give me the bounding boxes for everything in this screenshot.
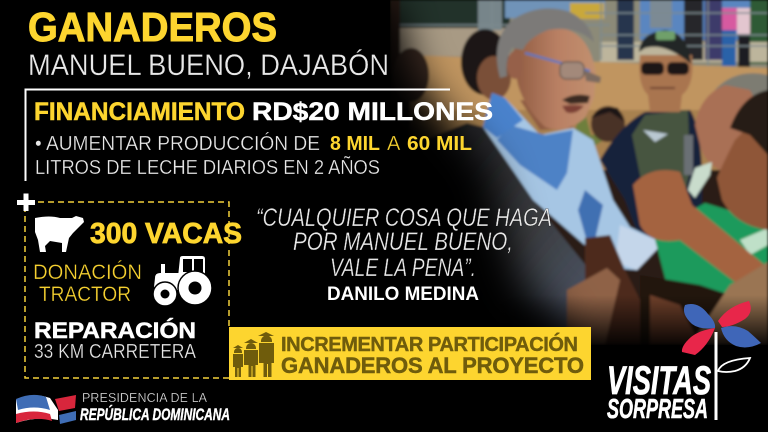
dashed frame bbox=[25, 202, 229, 378]
production line: • AUMENTAR PRODUCCIÓN DE bbox=[35, 132, 320, 155]
quote bbox=[256, 204, 552, 282]
green dress bbox=[653, 203, 768, 297]
quote: “CUALQUIER COSA QUE HAGA bbox=[256, 204, 552, 232]
production line bbox=[35, 132, 472, 155]
logo: visitas sorpresa bbox=[607, 301, 761, 424]
president shirt bbox=[483, 93, 663, 270]
banner line 2: GANADEROS AL PROYECTO bbox=[281, 353, 584, 378]
icon: flower bbox=[682, 301, 761, 420]
subtitle: MANUEL BUENO, DAJABÓN bbox=[28, 49, 389, 82]
president neck and face bbox=[520, 100, 573, 130]
visitas text: VISITAS bbox=[607, 359, 711, 403]
presidencia text: PRESIDENCIA DE LA bbox=[82, 391, 208, 405]
icon: dominican flag bbox=[16, 395, 76, 424]
president glasses bbox=[525, 53, 590, 71]
president hair bbox=[497, 8, 594, 78]
title: GANADEROS bbox=[28, 4, 277, 50]
sorpresa text: SORPRESA bbox=[607, 393, 708, 424]
man behind bbox=[461, 29, 509, 95]
guard body bbox=[600, 110, 702, 240]
woman 2 bbox=[717, 125, 768, 230]
president vest bbox=[400, 123, 590, 345]
icon: farmers bbox=[233, 332, 274, 377]
cows count: 300 VACAS bbox=[90, 218, 242, 250]
icon: cow bbox=[35, 216, 84, 252]
small man bbox=[575, 105, 611, 147]
panel frame bbox=[26, 90, 450, 181]
woman 1 bbox=[715, 73, 768, 125]
panel: additional benefits bbox=[17, 194, 242, 378]
logo: presidencia bbox=[16, 391, 230, 424]
tractor donation text: TRACTOR bbox=[39, 283, 131, 306]
road repair heading: REPARACIÓN bbox=[34, 318, 196, 343]
lower hands bbox=[585, 235, 640, 345]
quote: POR MANUEL BUENO, bbox=[293, 228, 513, 256]
railing bbox=[400, 0, 768, 66]
production line: A bbox=[387, 133, 401, 155]
guard head bbox=[639, 55, 693, 112]
tractor donation text bbox=[33, 261, 142, 306]
production line: 8 MIL bbox=[330, 133, 380, 155]
panel: financing bbox=[26, 90, 493, 181]
icon: tractor bbox=[153, 256, 212, 306]
tractor donation text: DONACIÓN bbox=[33, 261, 142, 284]
financing heading: FINANCIAMIENTO bbox=[34, 98, 245, 126]
banner background bbox=[229, 327, 591, 380]
banner line 1: INCREMENTAR PARTICIPACIÓN bbox=[281, 332, 578, 356]
financing amount: RD$20 MILLONES bbox=[252, 98, 493, 126]
spectators bbox=[617, 0, 634, 60]
milk line: LITROS DE LECHE DIARIOS EN 2 AÑOS bbox=[35, 156, 380, 179]
clasped hands and arm bbox=[633, 170, 768, 295]
production line: 60 MIL bbox=[407, 133, 472, 155]
republica text: REPÚBLICA DOMINICANA bbox=[80, 405, 230, 424]
photo fade bbox=[0, 0, 600, 432]
background wall and building bbox=[400, 0, 768, 70]
icon: plus bbox=[17, 194, 35, 211]
banner: increase participation bbox=[229, 327, 591, 380]
road repair detail: 33 KM CARRETERA bbox=[34, 341, 197, 363]
quote author: DANILO MEDINA bbox=[327, 283, 479, 305]
quote: VALE LA PENA”. bbox=[330, 254, 476, 282]
